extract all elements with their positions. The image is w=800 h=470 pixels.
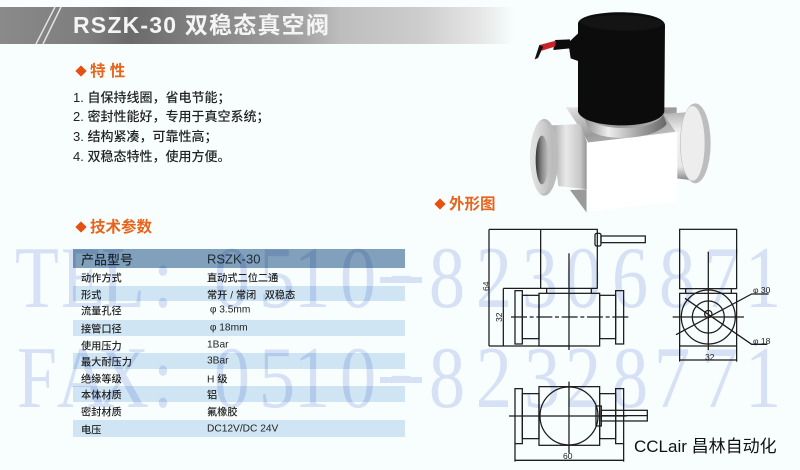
row: voltage: 电压: [81, 425, 101, 436]
row: working pressure: 使用压力: [81, 341, 122, 352]
dimension phi 18: φ 18: [753, 336, 771, 346]
side view: [489, 229, 645, 350]
table header row: 产品型号: [81, 252, 133, 267]
row: connection bore: [73, 320, 405, 336]
dimension 60: 60: [563, 451, 573, 461]
cable grommet: [568, 32, 580, 62]
row: seal material: 氟橡胶: [207, 408, 238, 418]
parameter table: [73, 249, 405, 437]
row: max pressure: 最大耐压力: [81, 358, 132, 368]
row: voltage: [73, 420, 405, 437]
row: flow bore: [81, 304, 250, 318]
banner slashes: [35, 7, 62, 44]
feature 1: 1. 自保持线圈，省电节能；: [73, 90, 230, 105]
heading: features: [75, 62, 125, 80]
right flange: [680, 103, 711, 183]
row: working pressure: 1Bar: [207, 339, 229, 350]
table header row: [73, 249, 405, 268]
red cable: [539, 41, 556, 51]
row: max pressure: 3Bar: [207, 356, 229, 366]
under side of body: [570, 189, 587, 213]
row: seal material: [81, 406, 238, 418]
row: action mode: [81, 272, 278, 284]
row: connection bore: φ 18mm: [210, 322, 248, 334]
feature 2: 2. 密封性能好，专用于真空系统；: [73, 109, 269, 124]
heading: technical parameters: 技术参数: [90, 219, 152, 236]
right pipe: [663, 112, 690, 180]
title banner: [0, 7, 520, 44]
row: action mode: 动作方式: [81, 274, 122, 284]
top view: [509, 382, 647, 462]
coil base ring: [583, 115, 667, 138]
heading: features: 特 性: [90, 63, 125, 80]
row: action mode: 直动式二位二通: [207, 274, 278, 284]
row: insulation: [81, 374, 228, 385]
row: insulation: 绝缘等级: [81, 374, 122, 385]
feature 4: 4. 双稳态特性，使用方便。: [73, 149, 230, 164]
bore: [536, 136, 548, 184]
dimension phi 30: φ 30: [753, 285, 771, 295]
heading: outline drawing: 外形图: [449, 196, 496, 213]
row: voltage: DC12V/DC 24V: [207, 423, 278, 434]
row: form: [73, 286, 405, 301]
back face of body: [566, 107, 677, 143]
row: seal material: 密封材质: [81, 408, 122, 418]
black coil: [578, 12, 665, 125]
row: form: 常开 / 常闭 双稳态: [207, 290, 295, 301]
dimension 32 left: 32: [494, 312, 504, 322]
watermark: telephone: TEL: 0510-82306871: [15, 222, 781, 327]
table header row: RSZK-30: [207, 251, 260, 266]
dimension labels: [481, 281, 771, 461]
white body block: [587, 133, 677, 212]
title: RSZK-30 双稳态真空阀: [73, 12, 330, 38]
row: body material: 本体材质: [81, 390, 122, 402]
watermark: fax: FAX: 0510-82328771: [17, 322, 781, 427]
row: body material: [73, 386, 405, 402]
dimension 32 bottom: 32: [705, 352, 715, 362]
row: form: 形式: [81, 290, 101, 301]
row: body material: 铝: [207, 390, 217, 402]
row: flow bore: 流量孔径: [81, 306, 122, 318]
dimension 64: 64: [481, 281, 491, 291]
end view: [673, 229, 769, 362]
feature list: [73, 90, 269, 164]
row: working pressure: [81, 339, 229, 352]
row: connection bore: 接管口径: [81, 324, 122, 336]
left pipe: [552, 124, 587, 189]
left flange: [530, 119, 558, 196]
company label: CCLair 昌林自动化: [634, 437, 777, 456]
row: insulation: H 级: [207, 374, 227, 385]
row: max pressure: [73, 353, 405, 369]
row: flow bore: φ 3.5mm: [210, 304, 250, 316]
feature 3: 3. 结构紧凑，可靠性高；: [73, 129, 217, 144]
black cable: [553, 39, 570, 50]
